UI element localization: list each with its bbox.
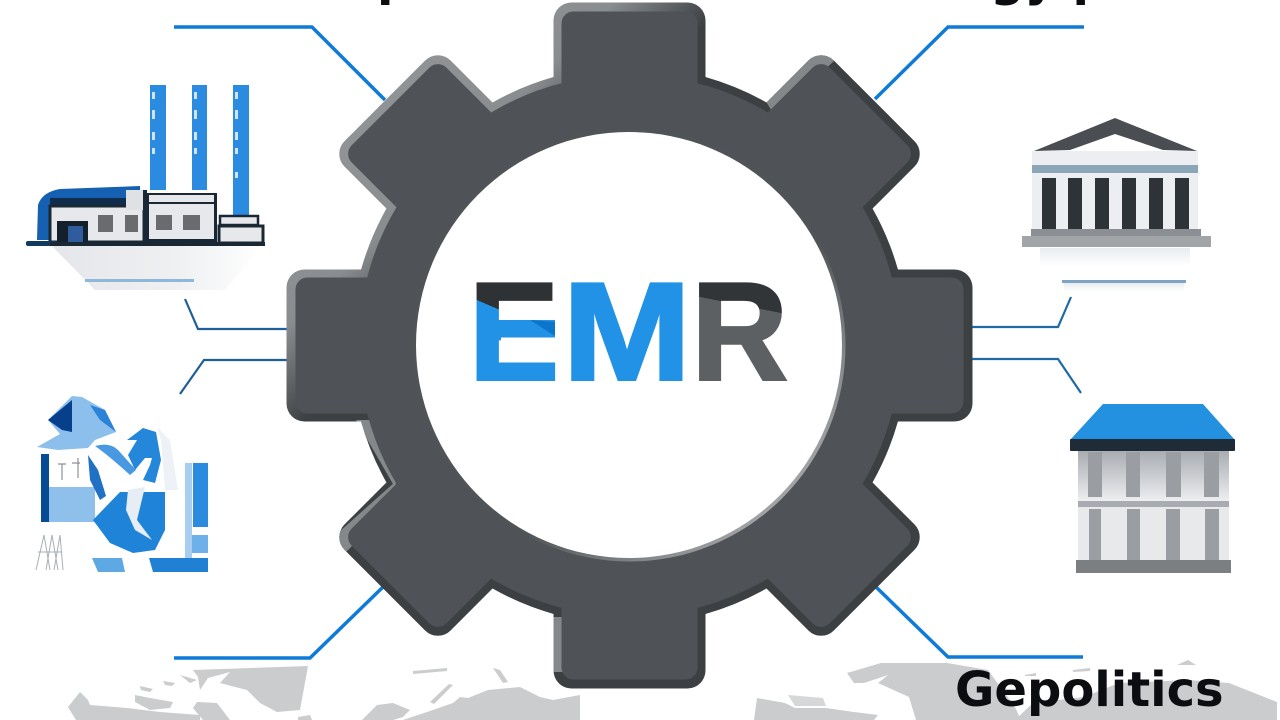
white swirl [126, 487, 152, 540]
connector: right lower [970, 359, 1081, 393]
gear edge [280, 0, 980, 695]
columns [1088, 452, 1219, 560]
blue roof [37, 186, 140, 240]
connector: top left [174, 27, 385, 100]
swoosh blue upper [127, 428, 161, 483]
left wall [41, 454, 49, 522]
connector: right upper [970, 297, 1071, 327]
letter E: E [469, 255, 559, 410]
E middle bar extension [498, 320, 555, 338]
icon: classical bank [1022, 118, 1211, 292]
left building [50, 206, 144, 242]
connector: bottom right [876, 587, 1083, 657]
bank shadow [1040, 248, 1190, 266]
small marks [58, 458, 80, 480]
walls [1078, 451, 1229, 561]
connector: bottom left [174, 587, 383, 658]
right building [147, 193, 217, 242]
connector: left upper [185, 299, 290, 329]
annex [220, 216, 258, 225]
logo: EMR [469, 254, 788, 410]
E accent [530, 320, 555, 336]
base [1076, 560, 1231, 573]
columns [1042, 178, 1189, 229]
steps [1031, 229, 1201, 237]
bank body [1032, 151, 1198, 231]
factory ground shadow [52, 246, 262, 290]
bank ground line [1062, 280, 1186, 283]
bottom bars [92, 558, 125, 572]
icon: blue roof building [1070, 404, 1235, 573]
light block [49, 487, 95, 522]
blue roof [1070, 404, 1235, 440]
central gear [280, 0, 980, 695]
windows [98, 215, 200, 232]
letter M: M [563, 255, 691, 410]
chimney marks [152, 92, 238, 178]
icon: factory [26, 85, 265, 290]
right tower [193, 463, 208, 527]
pediment [1034, 118, 1197, 151]
gear hole [416, 132, 842, 558]
letter R: R [692, 254, 788, 409]
frieze [1032, 165, 1198, 173]
icon: abstract blue plant [36, 396, 208, 572]
heading: geopolitics: Gepolitics [955, 662, 1224, 718]
connector: left lower [180, 360, 290, 394]
connector: top right [875, 27, 1084, 99]
world map background [68, 660, 1277, 720]
factory ground line [85, 279, 194, 282]
roof edge [1070, 439, 1235, 451]
light roof [37, 396, 116, 450]
door [57, 221, 88, 243]
E middle bar trim [501, 338, 556, 342]
gear hole rim [414, 130, 846, 562]
middle band [1078, 501, 1229, 507]
dark roof facet [48, 400, 72, 432]
swoosh blue lower [93, 492, 165, 553]
pale ribbon [157, 427, 178, 490]
map: left landmass [68, 666, 580, 720]
chimneys [150, 85, 249, 215]
gear body [296, 12, 964, 680]
pylons [36, 535, 63, 570]
base line [26, 241, 56, 246]
map: right landmass [754, 660, 1277, 720]
